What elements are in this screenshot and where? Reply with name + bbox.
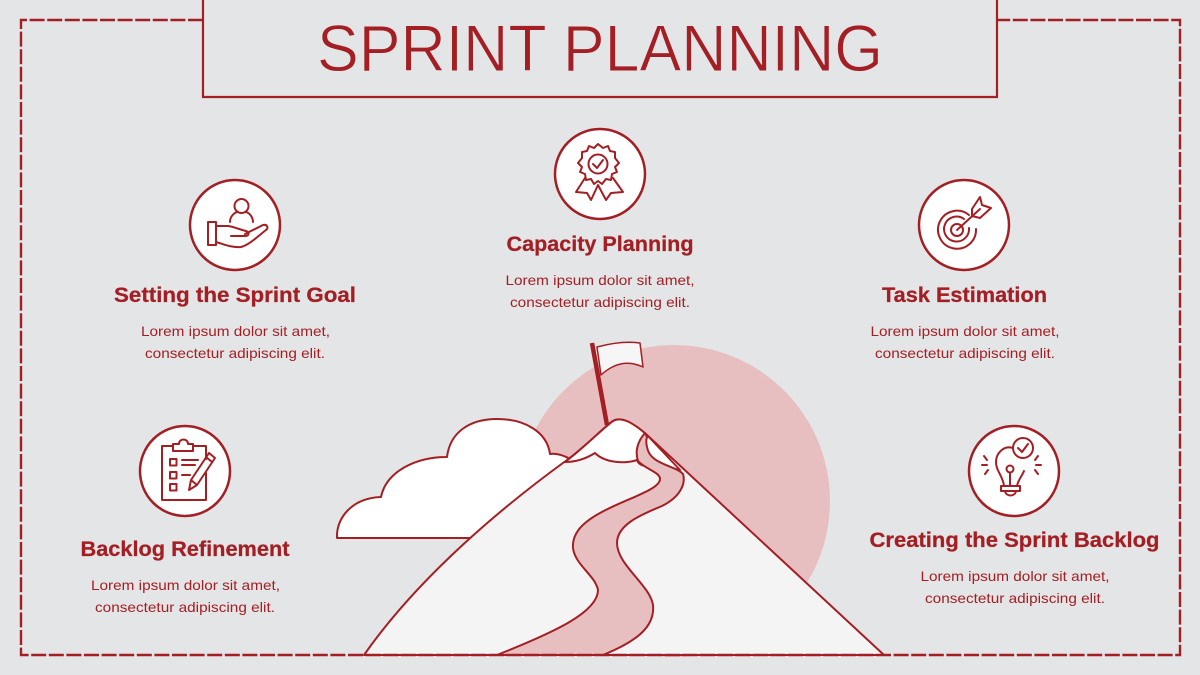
description: Lorem ipsum dolor sit amet,	[920, 568, 1110, 584]
description: consectetur adipiscing elit.	[510, 294, 690, 310]
icon: checklist clipboard	[140, 426, 230, 516]
mountain	[364, 419, 884, 655]
sun	[518, 345, 830, 657]
description: consectetur adipiscing elit.	[875, 345, 1055, 361]
item: Creating the Sprint Backlog	[870, 426, 1160, 606]
icon: award ribbon	[555, 129, 645, 219]
description: Lorem ipsum dolor sit amet,	[506, 272, 694, 288]
heading: Backlog Refinement	[80, 538, 290, 561]
heading: Creating the Sprint Backlog	[870, 529, 1160, 552]
title: SPRINT PLANNING	[317, 11, 883, 85]
item: Task Estimation	[870, 180, 1060, 361]
description: consectetur adipiscing elit.	[95, 599, 275, 615]
item: Backlog Refinement	[80, 426, 290, 615]
description: consectetur adipiscing elit.	[925, 590, 1105, 606]
item: Setting the Sprint Goal	[114, 180, 356, 361]
snow cap	[565, 419, 680, 470]
heading: Task Estimation	[882, 284, 1047, 307]
heading: Capacity Planning	[506, 233, 694, 256]
icon: hand holding person	[190, 180, 280, 270]
description: consectetur adipiscing elit.	[145, 345, 325, 361]
cloud	[337, 419, 570, 538]
description: Lorem ipsum dolor sit amet,	[91, 577, 280, 593]
item: Capacity Planning	[506, 129, 694, 310]
title box	[203, 0, 997, 97]
heading: Setting the Sprint Goal	[114, 284, 356, 307]
winding path	[497, 433, 684, 655]
icon: target with arrow	[919, 180, 1009, 270]
description: Lorem ipsum dolor sit amet,	[870, 323, 1060, 339]
icon: lightbulb with check	[969, 426, 1059, 516]
illustration: mountain with flag, cloud and sun	[337, 342, 884, 657]
description: Lorem ipsum dolor sit amet,	[141, 323, 330, 339]
flag	[592, 342, 643, 425]
